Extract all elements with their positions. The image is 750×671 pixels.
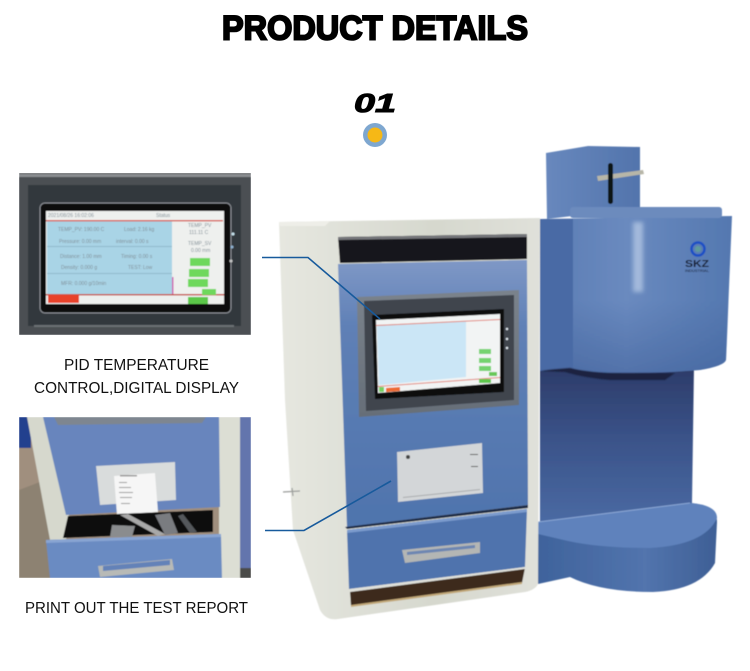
- photo: touch screen close-up: 111.11 C: [189, 230, 209, 236]
- photo: touch screen close-up: 0.00 mm: [191, 248, 210, 254]
- machine: brand logo: INDUSTRIAL: [685, 269, 709, 273]
- photo: touch screen close-up: Density: 0.000 g: [61, 265, 97, 271]
- caption: print out the test report: PRINT OUT THE TEST REPORT: [25, 600, 248, 617]
- photo: touch screen close-up: TEMP_PV: [188, 223, 212, 229]
- machine: head: [540, 207, 732, 380]
- machine: blue front panel: [338, 260, 528, 527]
- step number: 01: [354, 88, 396, 118]
- machine: touch screen: [357, 290, 519, 417]
- machine: cabinet shell: [279, 218, 540, 619]
- photo: touch screen close-up: 2021/08/26 16:02:06: [48, 213, 94, 219]
- photo: touch screen close-up: [19, 173, 251, 335]
- photo: touch screen close-up: interval: 0.00 s: [116, 239, 149, 245]
- machine: black top strip: [338, 234, 527, 263]
- machine: [279, 146, 732, 619]
- photo: touch screen close-up: TEST: Low: [128, 265, 153, 271]
- machine: side latch: [283, 488, 300, 496]
- machine: column and base: [538, 365, 717, 592]
- machine: brand logo: [685, 242, 709, 273]
- machine: brand logo: SKZ: [685, 259, 709, 270]
- machine: top feed box: [546, 146, 644, 219]
- photo: touch screen close-up: TEMP_SV: [188, 241, 212, 247]
- title: PRODUCT DETAILS: [222, 10, 528, 48]
- photo: touch screen close-up: TEMP_PV: 190.00 C: [58, 227, 105, 233]
- caption: PID temperature: PID TEMPERATURE: [64, 357, 209, 374]
- photo: touch screen close-up: MFR: 0.000 g/10min: [61, 281, 107, 287]
- machine: drawer: [345, 505, 528, 607]
- machine: printer: [397, 443, 483, 502]
- photo: touch screen close-up: Status: [156, 213, 171, 219]
- leader line: touch screen: [262, 258, 380, 319]
- step marker dot: [363, 123, 387, 147]
- caption: digital display: CONTROL,DIGITAL DISPLAY: [34, 380, 239, 397]
- photo: touch screen close-up: Load: 2.16 kg: [124, 227, 155, 233]
- photo: printer and open drawer: [19, 417, 251, 578]
- leader line: printer: [265, 481, 391, 530]
- photo: touch screen close-up: Distance: 1.00 mm: [60, 254, 102, 260]
- photo: touch screen close-up: Pressure: 0.00 mm: [59, 239, 101, 245]
- photo: touch screen close-up: Timing: 0.00 s: [121, 254, 153, 260]
